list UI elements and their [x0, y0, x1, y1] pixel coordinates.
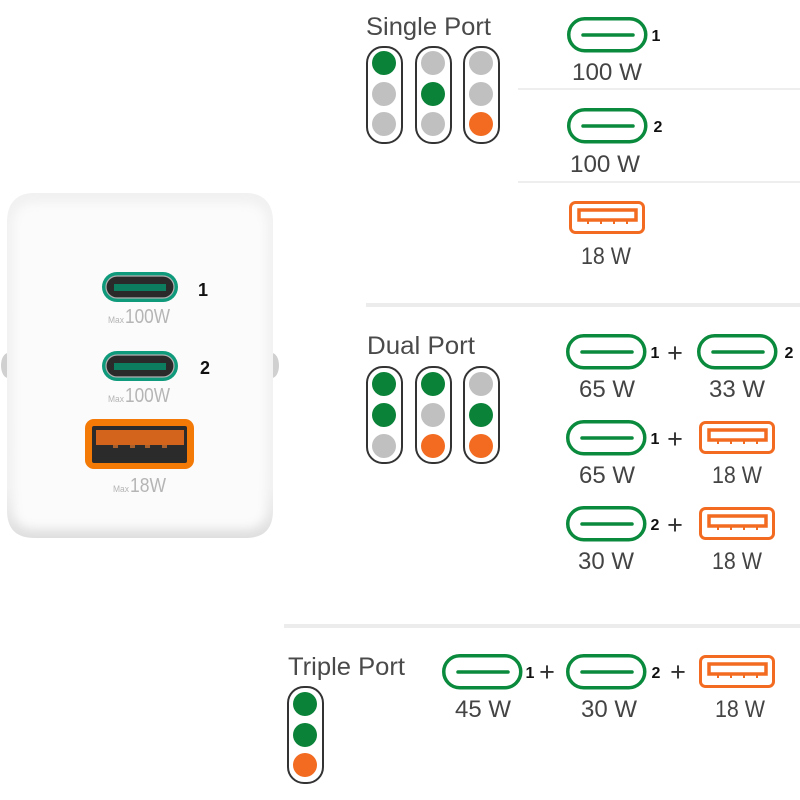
- row: 45 W + 30 W + 18 W: [444, 656, 774, 723]
- row: 30 W + 18 W: [568, 508, 774, 575]
- row: 45 W + 30 W + 18 W: 30 W: [581, 696, 637, 723]
- port 2 rating: Max: [108, 394, 124, 404]
- row: 45 W + 30 W + 18 W: +: [670, 657, 686, 687]
- indicator: ports 1 and 2: [367, 367, 402, 463]
- row: 30 W + 18 W: 2: [651, 517, 660, 534]
- panel: triple port: [288, 653, 774, 783]
- row: 65 W + 18 W: 1: [651, 431, 660, 448]
- USB-C port 2: [102, 351, 178, 381]
- indicator: port 2 active: [416, 47, 451, 143]
- heading: triple port: Triple Port: [288, 653, 405, 681]
- row: 65 W + 33 W: [568, 336, 794, 403]
- row: 30 W + 18 W: 18 W: [712, 548, 762, 575]
- USB-A rating: [113, 475, 166, 497]
- port 1 rating: [108, 306, 170, 328]
- USB-A port: [85, 419, 194, 469]
- indicator: all ports: [288, 687, 323, 783]
- row: 65 W + 18 W: +: [667, 424, 683, 454]
- rating: 18 W: 18 W: [581, 243, 631, 270]
- port 1 rating: 100W: [125, 306, 170, 328]
- USB-A rating: Max: [113, 484, 129, 494]
- row: 45 W + 30 W + 18 W: 1: [526, 665, 535, 682]
- row: 65 W + 33 W: 33 W: [709, 376, 765, 403]
- USB-A rating: 18W: [130, 475, 166, 497]
- row: 45 W + 30 W + 18 W: +: [539, 657, 555, 687]
- indicator: port 1 active: [367, 47, 402, 143]
- row: 30 W + 18 W: +: [667, 510, 683, 540]
- heading: single port: Single Port: [366, 13, 491, 41]
- indicator: USB-A active: [464, 47, 499, 143]
- icon: USB-A: [570, 202, 644, 232]
- indicator: ports 2 and USB-A: [464, 367, 499, 463]
- row: 45 W + 30 W + 18 W: 45 W: [455, 696, 511, 723]
- port 1 rating: Max: [108, 315, 124, 325]
- number 1: 1: [652, 28, 661, 45]
- number 2: 2: [654, 119, 663, 136]
- row: 65 W + 33 W: 65 W: [579, 376, 635, 403]
- row: 30 W + 18 W: 30 W: [578, 548, 634, 575]
- row: 65 W + 33 W: 2: [785, 345, 794, 362]
- charger body: [7, 193, 273, 538]
- row: 65 W + 18 W: 65 W: [579, 462, 635, 489]
- rating: 100 W: 100 W: [572, 59, 642, 86]
- panel: single port: [366, 13, 663, 270]
- icon: USB-C 1: [569, 19, 646, 51]
- rating: 100 W: 100 W: [570, 151, 640, 178]
- port 1 number: 1: [198, 280, 208, 300]
- row: 65 W + 18 W: [568, 422, 774, 489]
- heading: dual port: Dual Port: [367, 332, 475, 360]
- panel: dual port: [367, 332, 794, 575]
- icon: USB-C 2: [569, 110, 646, 142]
- port 2 rating: [108, 385, 170, 407]
- charger illustration: [1, 193, 279, 538]
- row: 65 W + 33 W: 1: [651, 345, 660, 362]
- row: 65 W + 18 W: 18 W: [712, 462, 762, 489]
- port 2 number: 2: [200, 358, 210, 378]
- row: 45 W + 30 W + 18 W: 2: [652, 665, 661, 682]
- USB-C port 1: [102, 272, 178, 302]
- port 2 rating: 100W: [125, 385, 170, 407]
- charger side prongs: [1, 353, 279, 378]
- indicator: ports 1 and USB-A: [416, 367, 451, 463]
- row: 45 W + 30 W + 18 W: 18 W: [715, 696, 765, 723]
- row: 65 W + 33 W: +: [667, 338, 683, 368]
